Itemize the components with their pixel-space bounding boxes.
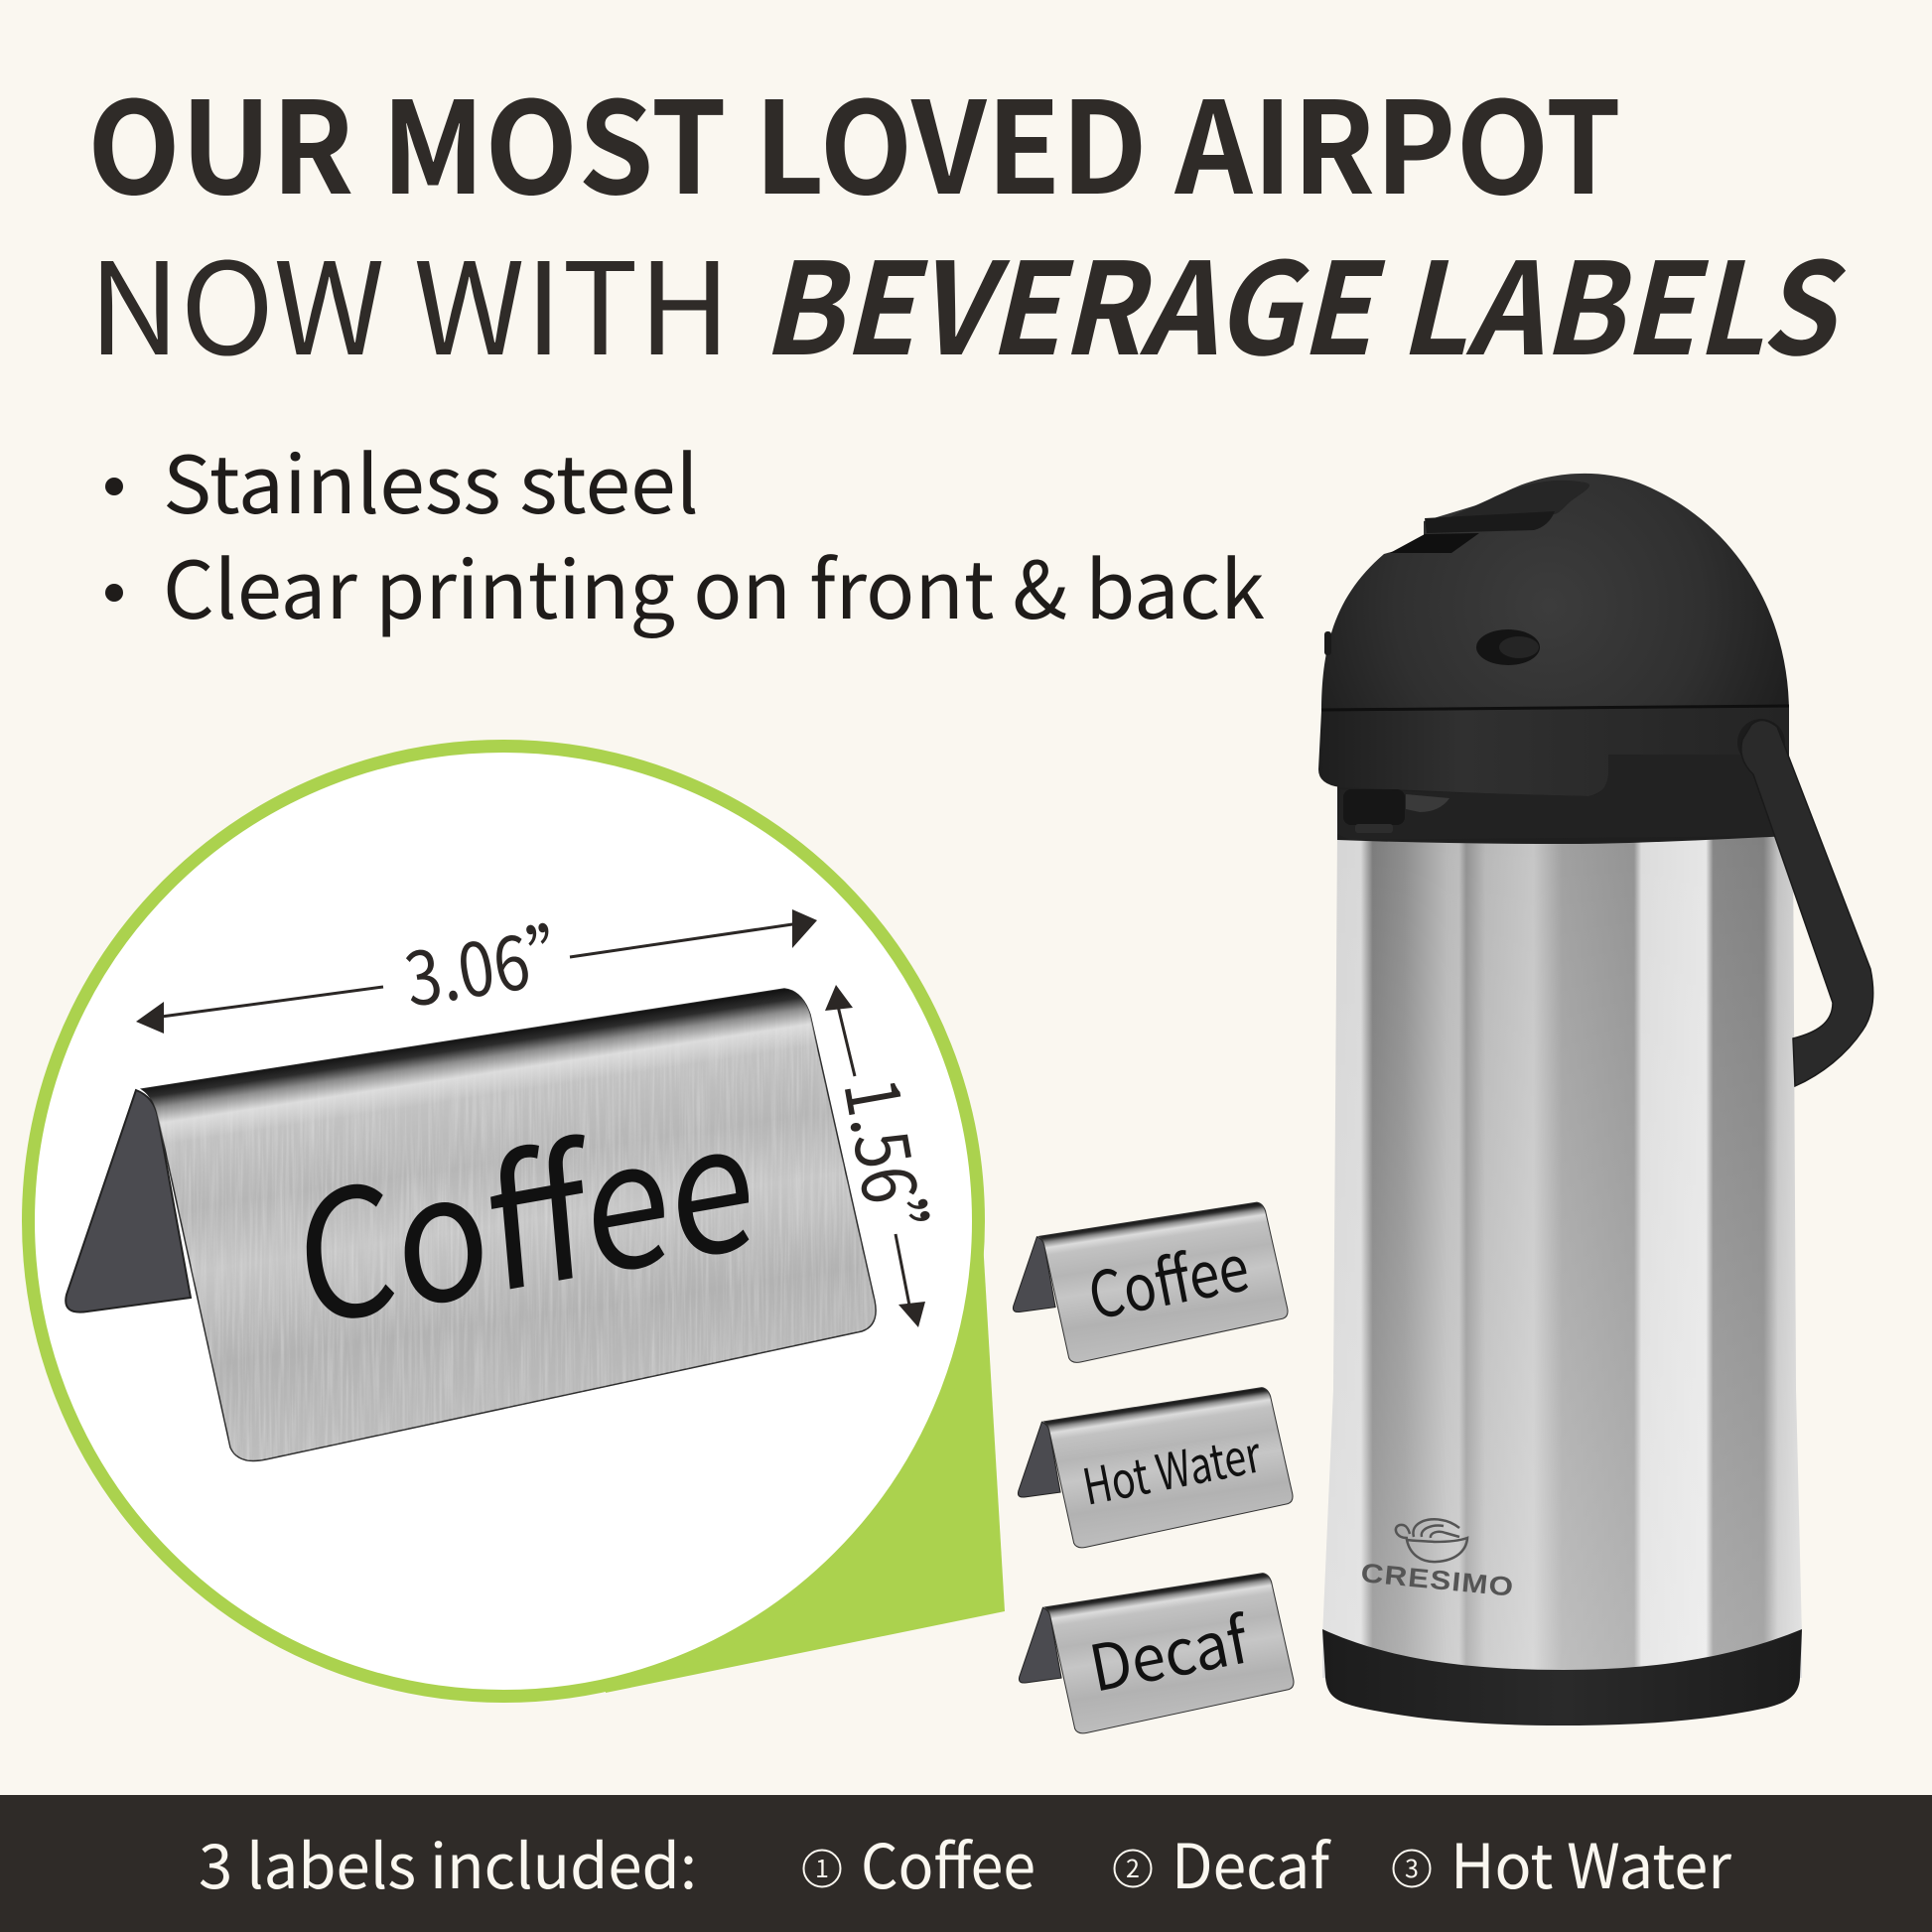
title line two: BEVERAGE LABELS — [761, 207, 1846, 391]
airpot rear strap — [1787, 1029, 1847, 1088]
item three: hot water: Hot Water — [1450, 1817, 1732, 1906]
height dimension arrow — [822, 985, 960, 1327]
logo cup — [1396, 1519, 1467, 1562]
airpot lid button — [1476, 629, 1540, 665]
item three: hot water: 3 — [1405, 1850, 1419, 1885]
bottom bar: labels included — [0, 1795, 1932, 1932]
width dimension arrow — [136, 894, 817, 1034]
airpot spout nozzle — [1343, 789, 1449, 833]
bullet: clear printing: Clear printing on front & back — [163, 527, 1265, 642]
callout pointer tail — [596, 1241, 1005, 1693]
logo wordmark: CRESIMO — [1359, 1558, 1516, 1602]
title — [87, 47, 1846, 391]
airpot handle — [1737, 719, 1873, 1086]
large coffee tent label — [66, 973, 894, 1479]
title line two: NOW WITH — [88, 207, 731, 391]
small label: coffee — [1013, 1202, 1288, 1362]
small label: coffee: Coffee — [1080, 1217, 1256, 1338]
small label: decaf — [1019, 1574, 1294, 1733]
bullet: stainless steel: Stainless steel — [163, 422, 699, 537]
large coffee tent label: Coffee — [286, 1041, 763, 1376]
airpot collar with spout — [1318, 706, 1789, 840]
airpot — [1318, 474, 1873, 1725]
airpot lower collar — [1337, 774, 1789, 844]
width dimension arrow: 3.06” — [397, 894, 600, 1029]
item two: decaf: Decaf — [1172, 1817, 1332, 1906]
small label: hot water — [1018, 1388, 1293, 1548]
item one: coffee: Coffee — [861, 1817, 1035, 1906]
airpot steel body — [1322, 834, 1802, 1678]
small label: decaf: Decaf — [1081, 1589, 1257, 1711]
small label: hot water: Hot Water — [1076, 1415, 1267, 1520]
airpot rubber base — [1322, 1629, 1802, 1725]
title line two — [88, 207, 1846, 391]
bar intro text: 3 labels included: — [199, 1817, 697, 1906]
airpot dome lid — [1321, 474, 1789, 713]
title line one: OUR MOST LOVED AIRPOT — [87, 47, 1621, 230]
height dimension arrow: 1.56” — [822, 1069, 960, 1274]
callout circle with enlarged coffee label — [28, 747, 1005, 1696]
item two: decaf: 2 — [1126, 1850, 1140, 1885]
callout ring — [28, 747, 979, 1696]
cresimo logo — [1359, 1519, 1516, 1602]
item one: coffee: 1 — [815, 1850, 829, 1885]
feature bullet list — [105, 422, 1265, 642]
